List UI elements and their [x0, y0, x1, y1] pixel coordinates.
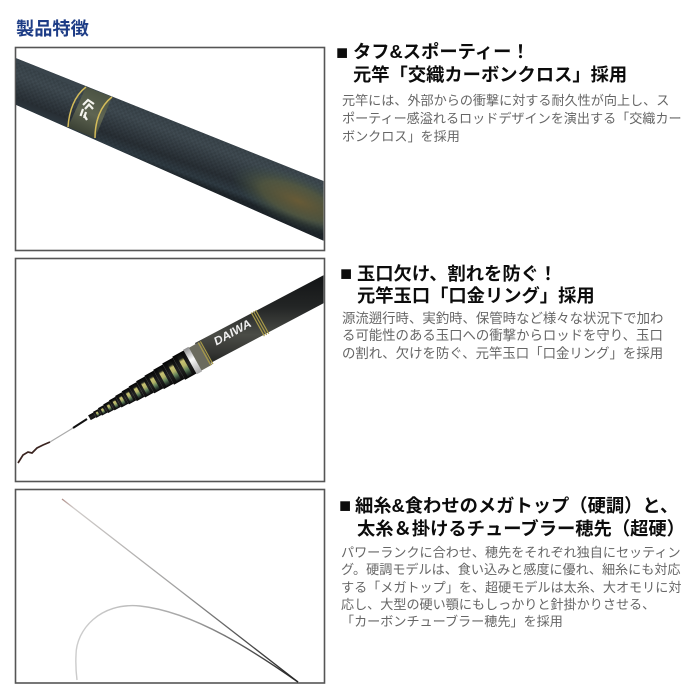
panel: heading and text for feature 2: 源流遡行時、実釣時、保管時など様々な状況下で加わ	[342, 310, 663, 326]
panel: heading and text for feature 2: ■	[340, 263, 352, 285]
panel: heading and text for feature 2: 玉口欠け、割れを防ぐ！	[357, 263, 557, 284]
panel: tip comparison	[16, 490, 324, 683]
photo: straight mega top tip	[62, 499, 298, 682]
panel: heading and text for feature 3: ■	[339, 495, 351, 517]
panel: heading and text for feature 1: ■	[336, 42, 348, 64]
panel: carbon cross butt section	[14, 46, 326, 252]
panel: heading and text for feature 2	[340, 263, 663, 361]
panel: heading and text for feature 1	[336, 41, 682, 144]
panel: heading and text for feature 2: の割れ、欠けを防ぐ、元竿玉口「口金リング」を採用	[342, 346, 663, 361]
photo: telescoped rod with ring	[18, 275, 324, 463]
brand name on rod: DAIWA	[212, 318, 254, 348]
panel: heading and text for feature 3: グ。硬調モデルは、食い込みと感度に優れ、細糸にも対応	[341, 561, 681, 577]
title: 製品特徴	[16, 19, 89, 39]
panel: heading and text for feature 2: る可能性のある玉口への衝撃からロッドを守り、玉口	[342, 328, 663, 343]
panel: heading and text for feature 3	[339, 495, 685, 629]
panel: heading and text for feature 3: 細糸&食わせのメガトップ（硬調）と、	[355, 495, 678, 516]
panel: heading and text for feature 3: パワーランクに合わせ、穂先をそれぞれ独自にセッティン	[341, 545, 681, 560]
panel: heading and text for feature 1: タフ&スポーティー！	[353, 41, 530, 62]
icon: brand mark on collar	[80, 100, 94, 120]
photo: rod with woven carbon cloth	[16, 58, 324, 241]
panel: heading and text for feature 3: 太糸＆掛けるチューブラー穂先（超硬）	[357, 518, 685, 539]
panel: heading and text for feature 3: 応し、大型の硬い顎にもしっかりと針掛かりさせる、	[341, 597, 655, 612]
panel: heading and text for feature 1: 元竿には、外部からの衝撃に対する耐久性が向上し、ス	[342, 93, 669, 108]
panel: heading and text for feature 2: 元竿玉口「口金リング」採用	[357, 285, 595, 306]
photo: bent tubular tip	[76, 606, 298, 682]
panel: heading and text for feature 1: 元竿「交織カーボンクロス」採用	[353, 64, 627, 85]
panel: heading and text for feature 3: する「メガトップ」を、超硬モデルは太糸、大オモリに対	[341, 579, 681, 595]
panel: mouth ring section	[16, 258, 324, 482]
panel: heading and text for feature 3: 「カーボンチューブラー穂先」を採用	[341, 613, 563, 629]
panel: heading and text for feature 1: ボンクロス」を採用	[342, 129, 460, 144]
panel: heading and text for feature 1: ポーティー感溢れるロッドデザインを演出する「交織カー	[342, 110, 682, 126]
